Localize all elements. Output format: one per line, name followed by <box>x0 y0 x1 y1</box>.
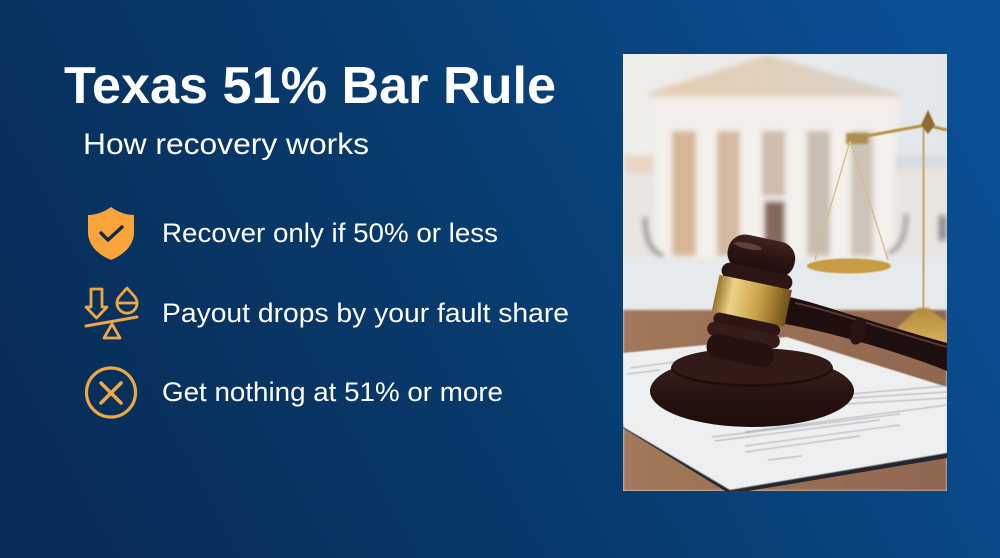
payout point text: Payout drops by your fault share <box>162 298 569 328</box>
gavel handle <box>785 297 947 371</box>
balance scale <box>807 110 947 343</box>
icon: circled x <box>86 368 136 417</box>
bar point text: Get nothing at 51% or more <box>162 377 503 407</box>
recovery point text: Recover only if 50% or less <box>162 218 498 248</box>
legal document <box>623 337 947 494</box>
icon: arrow and balance scale <box>86 288 137 338</box>
title: Texas 51% Bar Rule <box>64 57 556 115</box>
photo: gavel with courthouse and scales <box>623 54 947 494</box>
gavel head <box>706 234 796 368</box>
icon: shield with check <box>88 207 134 260</box>
gavel sound block <box>650 348 854 427</box>
courthouse <box>623 55 947 318</box>
subtitle: How recovery works <box>83 128 369 161</box>
table <box>623 310 947 491</box>
